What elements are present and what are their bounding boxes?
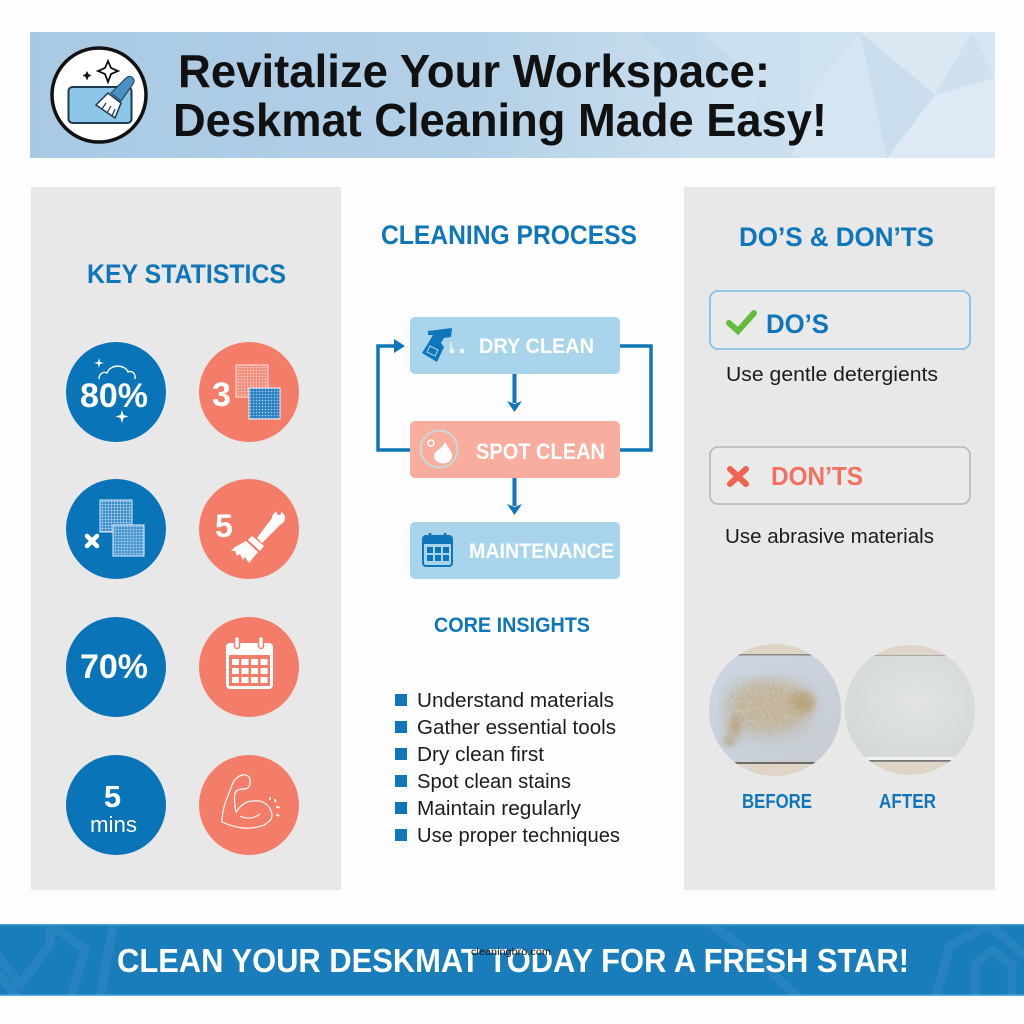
header banner <box>30 32 995 158</box>
call to action text: CLEAN YOUR DESKMAT TODAY FOR A FRESH STAR! <box>117 942 909 979</box>
stat: 5 brush <box>199 479 299 579</box>
label: after: AFTER <box>879 791 936 813</box>
step: maintenance: MAINTENANCE <box>469 540 614 563</box>
step: maintenance <box>410 522 620 579</box>
title: Revitalize Your Workspace: <box>178 45 770 97</box>
title <box>173 45 827 146</box>
stat: 80%: 80% <box>80 377 148 415</box>
stat: 3 material swatches: 3 <box>212 376 231 414</box>
list: core insights <box>395 690 620 847</box>
heading: key statistics: KEY STATISTICS <box>87 259 286 289</box>
arrow: spot clean to maintenance <box>507 478 522 515</box>
list: core insights: Maintain regularly <box>417 798 581 820</box>
stat: 5 mins: mins <box>90 812 137 837</box>
photo: before <box>709 644 841 776</box>
list: core insights: Understand materials <box>417 690 614 712</box>
stat: 80% <box>66 342 166 442</box>
panel: key statistics <box>31 187 341 890</box>
arrow: feedback loop right <box>620 346 651 450</box>
heading: do's and don'ts: DO’S & DON’TS <box>739 222 934 252</box>
step: spot clean <box>410 421 620 478</box>
label: before: BEFORE <box>742 791 812 813</box>
step: dry clean: DRY CLEAN <box>479 335 594 358</box>
stat: 70% <box>66 617 166 717</box>
arrow: dry clean to spot clean <box>507 373 522 412</box>
list: core insights: Spot clean stains <box>417 771 571 793</box>
flowchart: cleaning process <box>378 317 651 579</box>
stat: flexed arm <box>199 755 299 855</box>
text: don't advice: Use abrasive materials <box>725 526 934 548</box>
stat: 5 brush: 5 <box>215 508 233 544</box>
stat: 3 material swatches <box>199 342 299 442</box>
stat: 5 mins: 5 <box>104 779 121 814</box>
card: don'ts: DON’TS <box>771 461 863 491</box>
panel: do's and don'ts <box>684 187 995 890</box>
heading: cleaning process: CLEANING PROCESS <box>381 220 637 250</box>
watermark: cleaningbro.com <box>471 946 551 958</box>
photo: after <box>845 645 975 775</box>
stat: 5 mins <box>66 755 166 855</box>
card: do's: DO’S <box>766 309 829 339</box>
arrow: feedback loop left <box>378 339 410 450</box>
icon: deskmat and brush logo <box>52 48 146 142</box>
list: core insights: Gather essential tools <box>417 717 616 739</box>
list: core insights: Dry clean first <box>417 744 544 766</box>
stat: avoid mesh materials <box>66 479 166 579</box>
footer banner <box>0 924 1024 996</box>
heading: core insights: CORE INSIGHTS <box>434 614 590 637</box>
card: don'ts <box>710 447 970 504</box>
stat: calendar <box>199 617 299 717</box>
step: dry clean <box>410 317 620 374</box>
text: do advice: Use gentle detergients <box>726 364 938 386</box>
step: spot clean: SPOT CLEAN <box>476 439 605 464</box>
card: do's <box>710 291 970 349</box>
stat: 70%: 70% <box>80 648 148 686</box>
list: core insights: Use proper techniques <box>417 825 620 847</box>
title: Deskmat Cleaning Made Easy! <box>173 94 827 146</box>
